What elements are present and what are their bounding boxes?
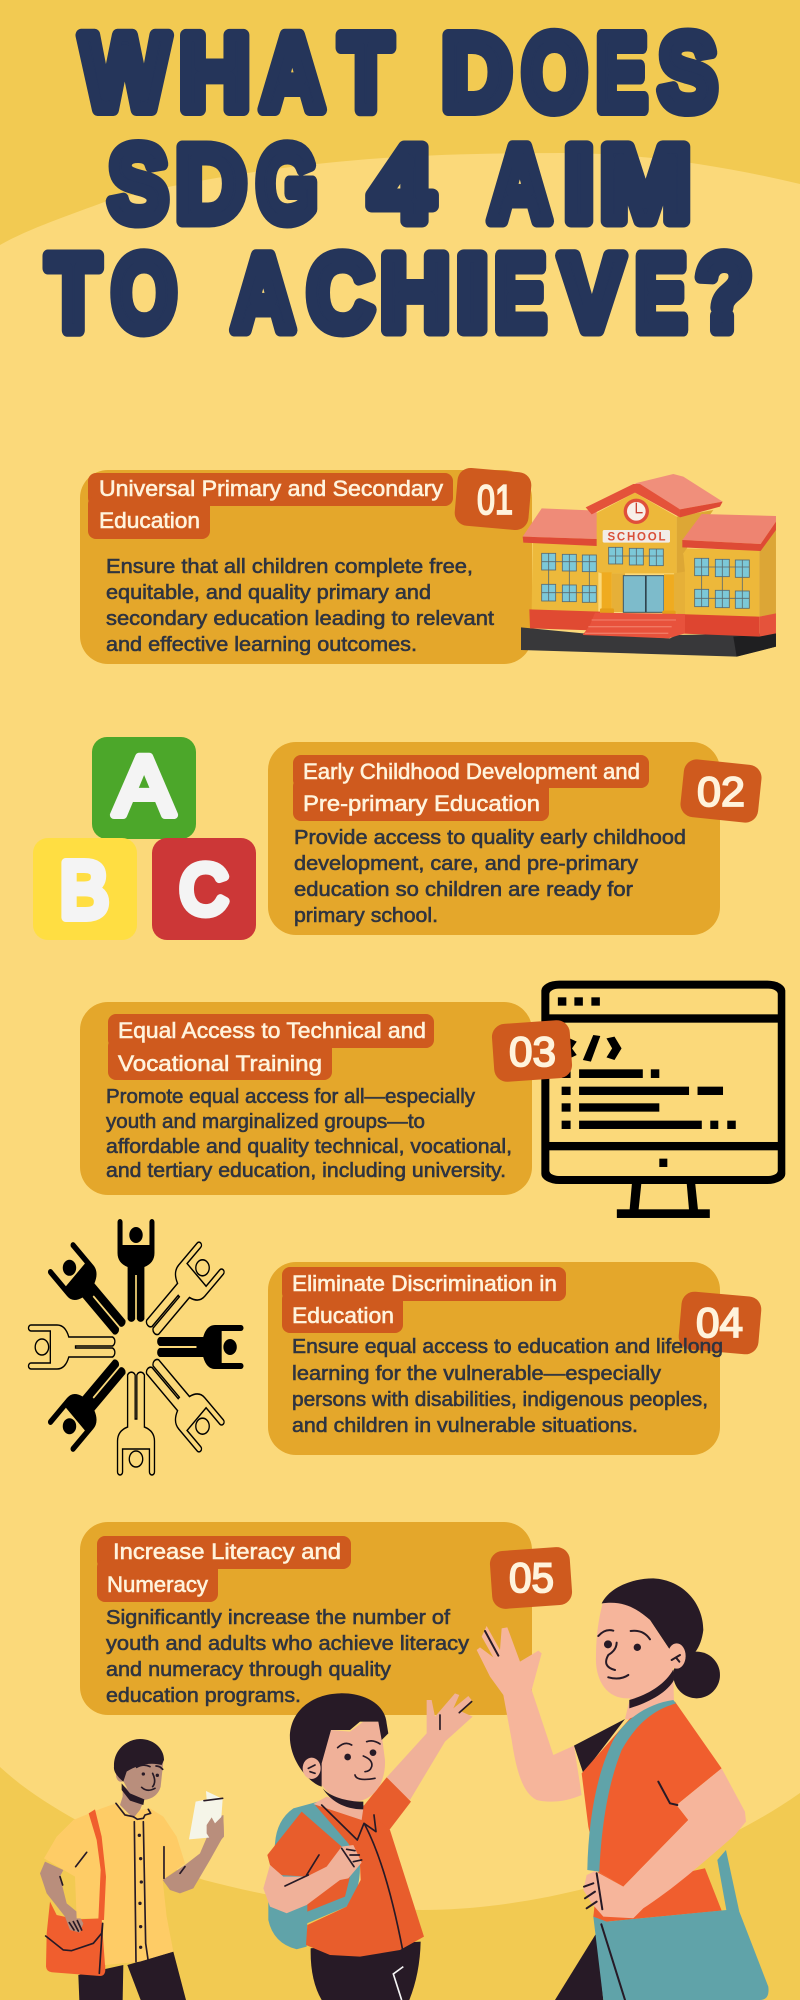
badge 03: 03 [509, 1028, 556, 1075]
badge 01: 01 [477, 476, 513, 523]
body text 3: and tertiary education, including university. [106, 1159, 506, 1182]
body text 4: and children in vulnerable situations. [292, 1414, 638, 1437]
body text 2: primary school. [294, 904, 438, 927]
body text 4: Ensure equal access to education and lifelong [292, 1335, 723, 1358]
body text 4: persons with disabilities, indigenous peoples, [292, 1388, 708, 1411]
badge 05: 05 [509, 1554, 554, 1601]
panel: increase literacy and numeracy [80, 1522, 532, 1715]
panel: early childhood development [268, 742, 720, 935]
panel: equal access to technical and vocational training [80, 1002, 532, 1195]
body text 5: and numeracy through quality [106, 1658, 392, 1681]
illustration: woman waving with bag [477, 1578, 769, 2000]
body text 2: education so children are ready for [294, 878, 633, 901]
title: W [81, 12, 169, 132]
title: D [176, 124, 246, 244]
heading tag 2: Pre-primary Education [303, 791, 540, 816]
illustration: boy with backpack [263, 1693, 473, 2000]
title: I [456, 233, 488, 353]
title [47, 12, 752, 353]
body text 1 [106, 555, 494, 656]
block B: B [60, 846, 109, 934]
heading tag 5: Numeracy [107, 1572, 208, 1597]
heading tag 3 [108, 1014, 434, 1080]
title: T [340, 12, 392, 132]
title: S [108, 124, 168, 244]
title: T [47, 233, 100, 353]
title: A [260, 12, 324, 132]
title: E [494, 233, 546, 353]
title: A [232, 233, 294, 353]
title: O [112, 233, 176, 353]
body text 3: Promote equal access for all—especially [106, 1085, 476, 1108]
heading tag 2 [293, 755, 649, 821]
badge 01 [454, 467, 532, 531]
badge 02 [679, 758, 763, 824]
title: E [635, 233, 687, 353]
body text 2 [294, 826, 686, 927]
body text 1: and effective learning outcomes. [106, 633, 417, 656]
title: O [522, 12, 587, 132]
title: 4 [370, 124, 433, 244]
heading tag 5: Increase Literacy and [113, 1539, 341, 1564]
block A [92, 737, 196, 839]
heading tag 1: Education [99, 508, 200, 533]
badge 04 [678, 1291, 762, 1355]
title: S [659, 12, 717, 132]
block B [33, 838, 137, 940]
heading tag 4: Eliminate Discrimination in [292, 1271, 557, 1296]
icon: abc blocks [33, 737, 256, 940]
block C [152, 838, 256, 940]
body text 2: development, care, and pre-primary [294, 852, 639, 875]
title: G [257, 124, 317, 244]
body text 3: youth and marginalized groups—to [106, 1110, 425, 1133]
badge 04: 04 [696, 1299, 743, 1346]
body text 3: affordable and quality technical, vocational, [106, 1135, 512, 1158]
title: M [600, 124, 691, 244]
heading tag 4: Education [292, 1303, 394, 1328]
heading tag 5 [97, 1536, 351, 1602]
body text 4 [292, 1335, 723, 1437]
title: ? [696, 233, 752, 353]
heading tag 3: Equal Access to Technical and [118, 1018, 426, 1043]
heading tag 2: Early Childhood Development and [303, 759, 640, 784]
body text 2: Provide access to quality early childhood [294, 826, 686, 849]
body text 5 [106, 1606, 470, 1707]
title: E [596, 12, 647, 132]
body text 3 [106, 1085, 512, 1182]
heading tag 1 [88, 473, 453, 539]
icon: computer monitor with code [541, 981, 785, 1218]
title: C [307, 233, 374, 353]
icon: school building: SCHOOL [608, 532, 666, 544]
badge 02: 02 [697, 768, 745, 815]
panel: eliminate discrimination in education [268, 1262, 762, 1455]
title: A [488, 124, 551, 244]
title: I [564, 124, 594, 244]
badge 05 [489, 1546, 573, 1610]
body text 4: learning for the vulnerable—especially [292, 1362, 662, 1385]
body text 1: secondary education leading to relevant [106, 607, 494, 630]
title: V [560, 233, 624, 353]
heading tag 4 [282, 1267, 566, 1333]
body text 1: equitable, and quality primary and [106, 581, 431, 604]
badge 03 [491, 1019, 573, 1083]
body text 5: youth and adults who achieve literacy [106, 1632, 470, 1655]
illustration: man reading [40, 1739, 224, 2000]
block A: A [114, 739, 174, 833]
body text 5: education programs. [106, 1684, 301, 1707]
icon: school building [521, 474, 776, 657]
body text 1: Ensure that all children complete free, [106, 555, 473, 578]
body text 5: Significantly increase the number of [106, 1606, 450, 1629]
title: H [179, 12, 250, 132]
block C: C [180, 850, 228, 928]
heading tag 1: Universal Primary and Secondary [99, 476, 443, 501]
icon: circle of eight people [28, 1219, 244, 1475]
heading tag 3: Vocational Training [118, 1051, 322, 1076]
panel: universal primary and secondary education [80, 470, 532, 664]
title: D [442, 12, 511, 132]
title: H [380, 233, 450, 353]
